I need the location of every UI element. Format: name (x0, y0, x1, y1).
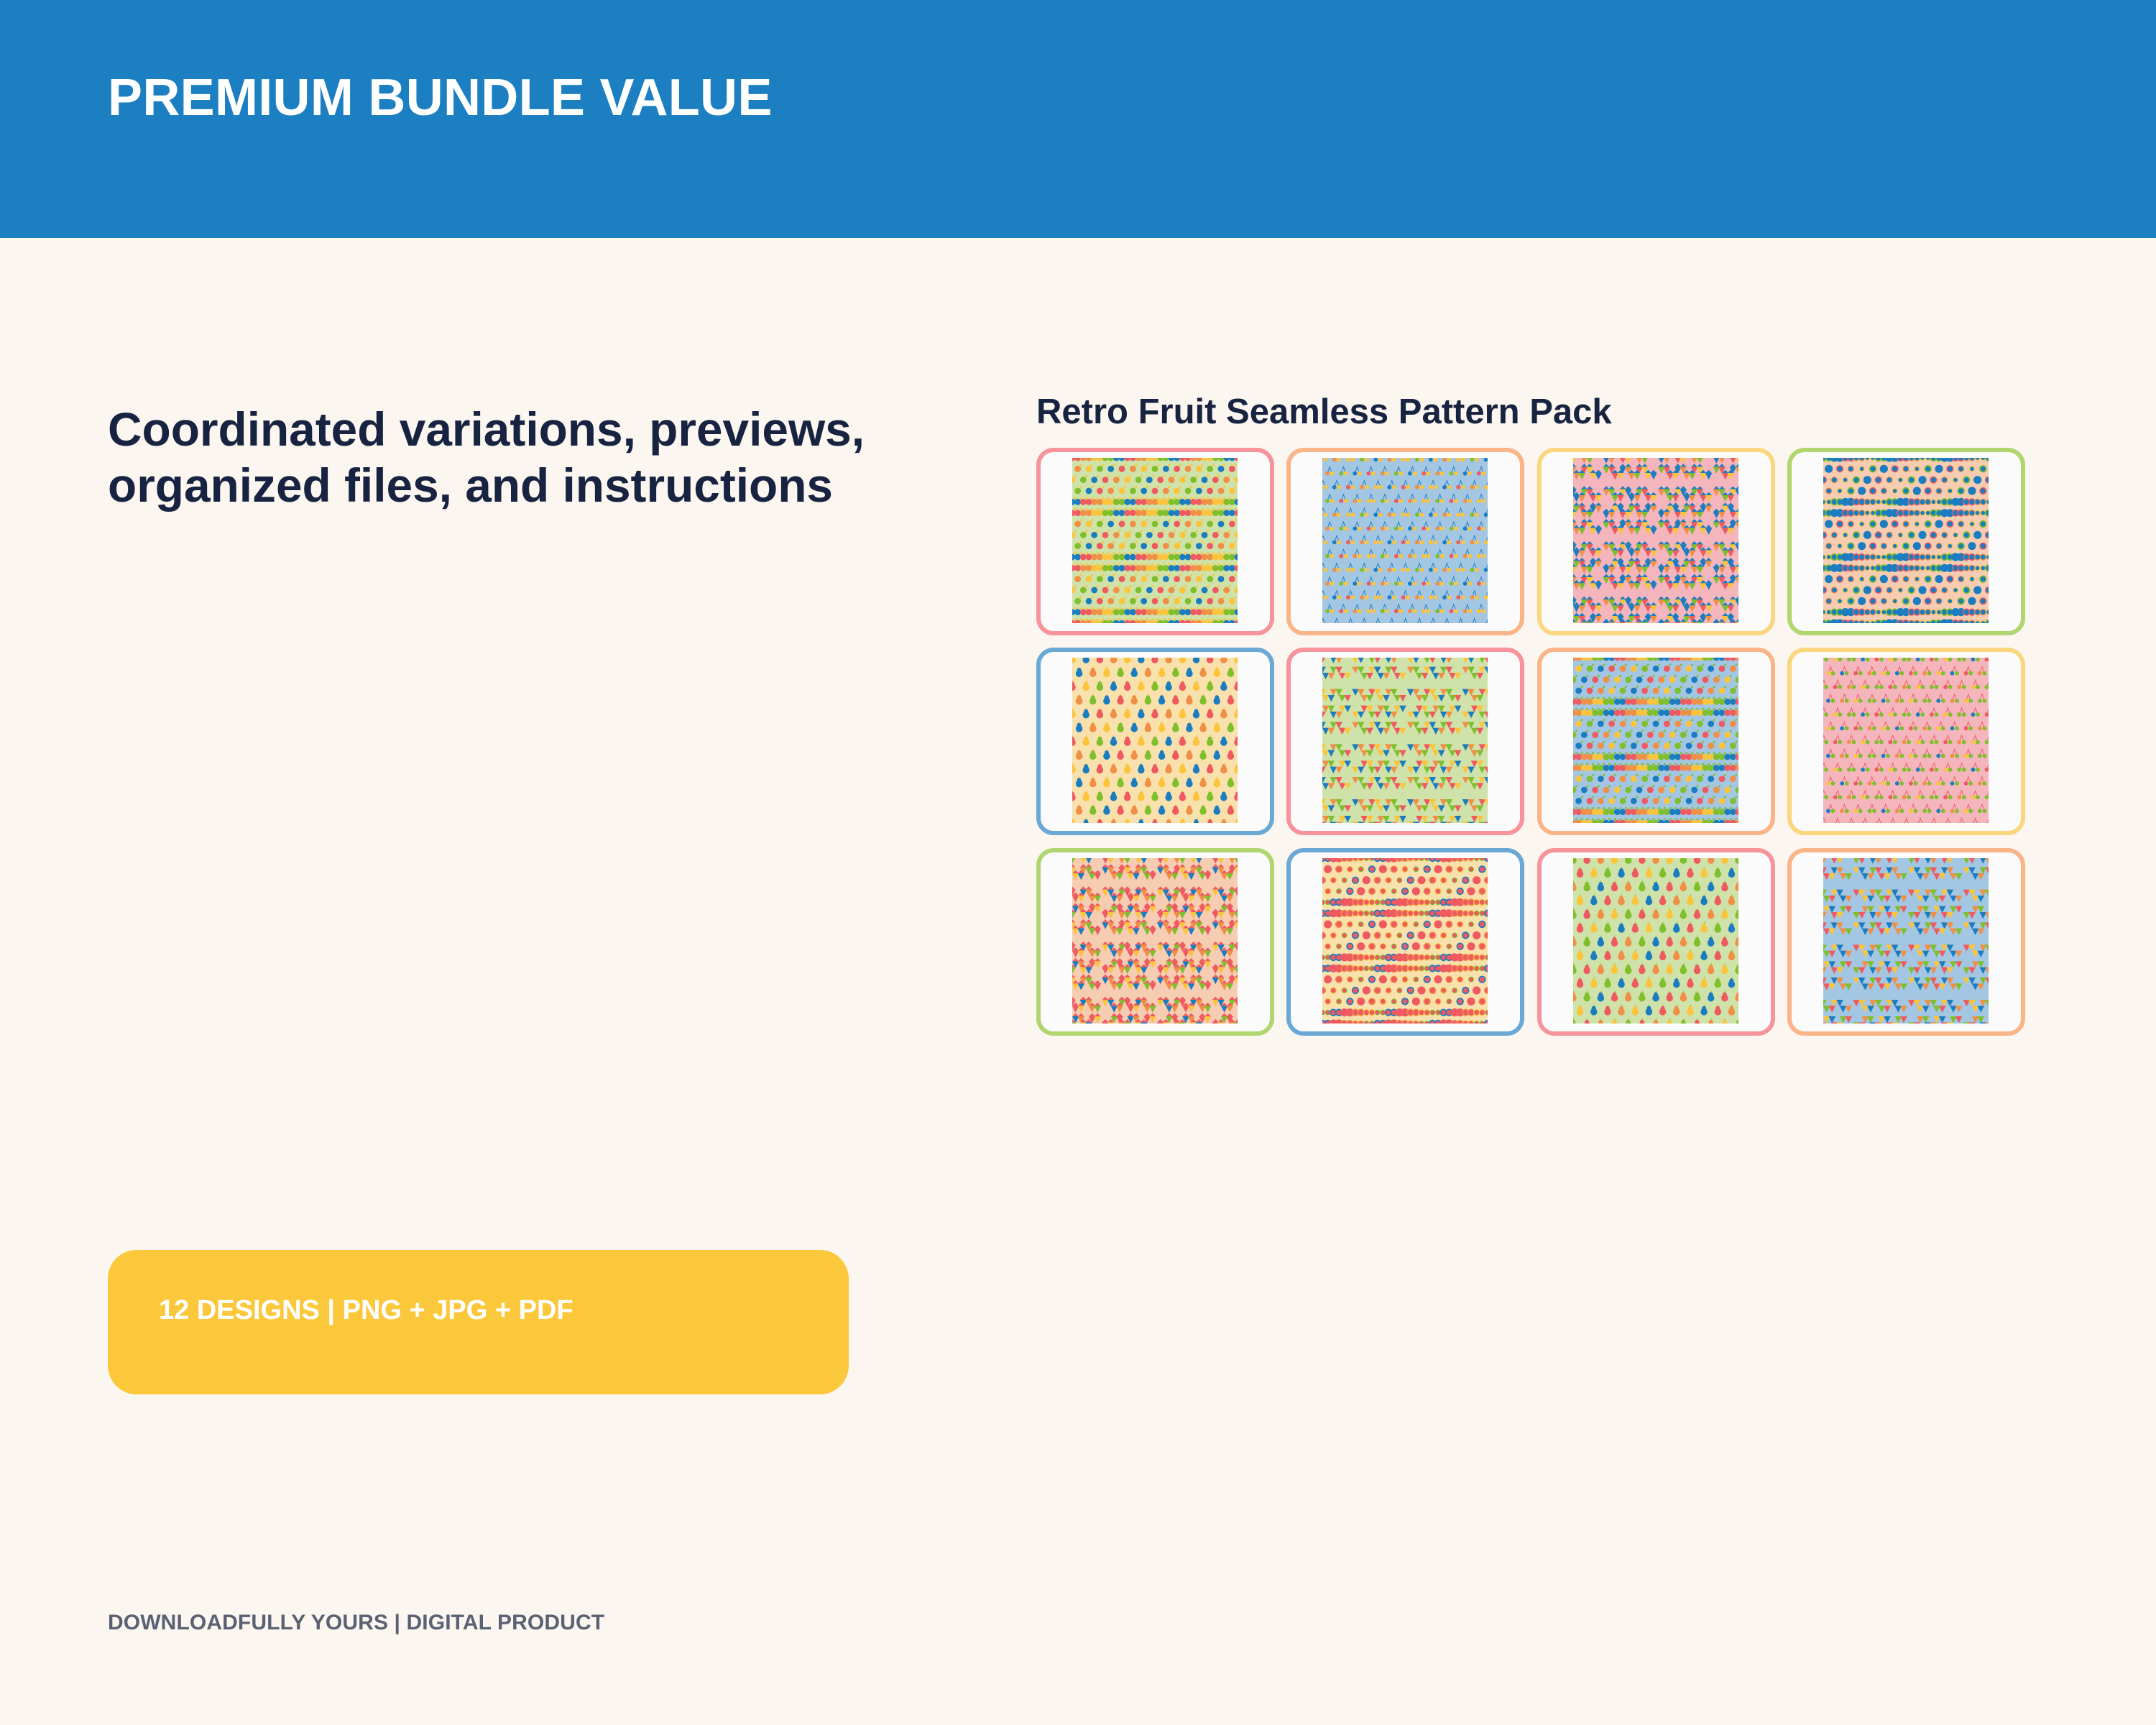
card 3: capped diamonds on pink (1537, 448, 1775, 635)
pattern pack heading: Retro Fruit Seamless Pattern Pack (1036, 392, 1612, 431)
subtitle text block: Coordinated variations, previews, (108, 402, 865, 456)
card 5: pears on yellow (1036, 648, 1274, 835)
card 12: triangles on blue (1787, 848, 2025, 1036)
card 7: apples on blue (1537, 648, 1775, 835)
pattern swatch grid (1036, 448, 2025, 1036)
card 4: ringed dots on peach (1787, 448, 2025, 635)
callout text: 12 DESIGNS | PNG + JPG + PDF (159, 1295, 573, 1325)
card 8: cherries on pink (1787, 648, 2025, 835)
card 6: triangles on green (1286, 648, 1524, 835)
subtitle text block: organized files, and instructions (108, 459, 833, 512)
title: PREMIUM BUNDLE VALUE (108, 69, 773, 126)
card 2: cherries on blue (1286, 448, 1524, 635)
card 9: capped diamonds on peach (1036, 848, 1274, 1036)
card 1: apples on green (1036, 448, 1274, 635)
card 10: ringed dots on yellow (1286, 848, 1524, 1036)
subtitle text block (108, 402, 865, 512)
footer text: DOWNLOADFULLY YOURS | DIGITAL PRODUCT (108, 1611, 604, 1634)
callout: designs and formats (108, 1250, 849, 1394)
card 11: pears on green (1537, 848, 1775, 1036)
header band (0, 0, 2156, 238)
